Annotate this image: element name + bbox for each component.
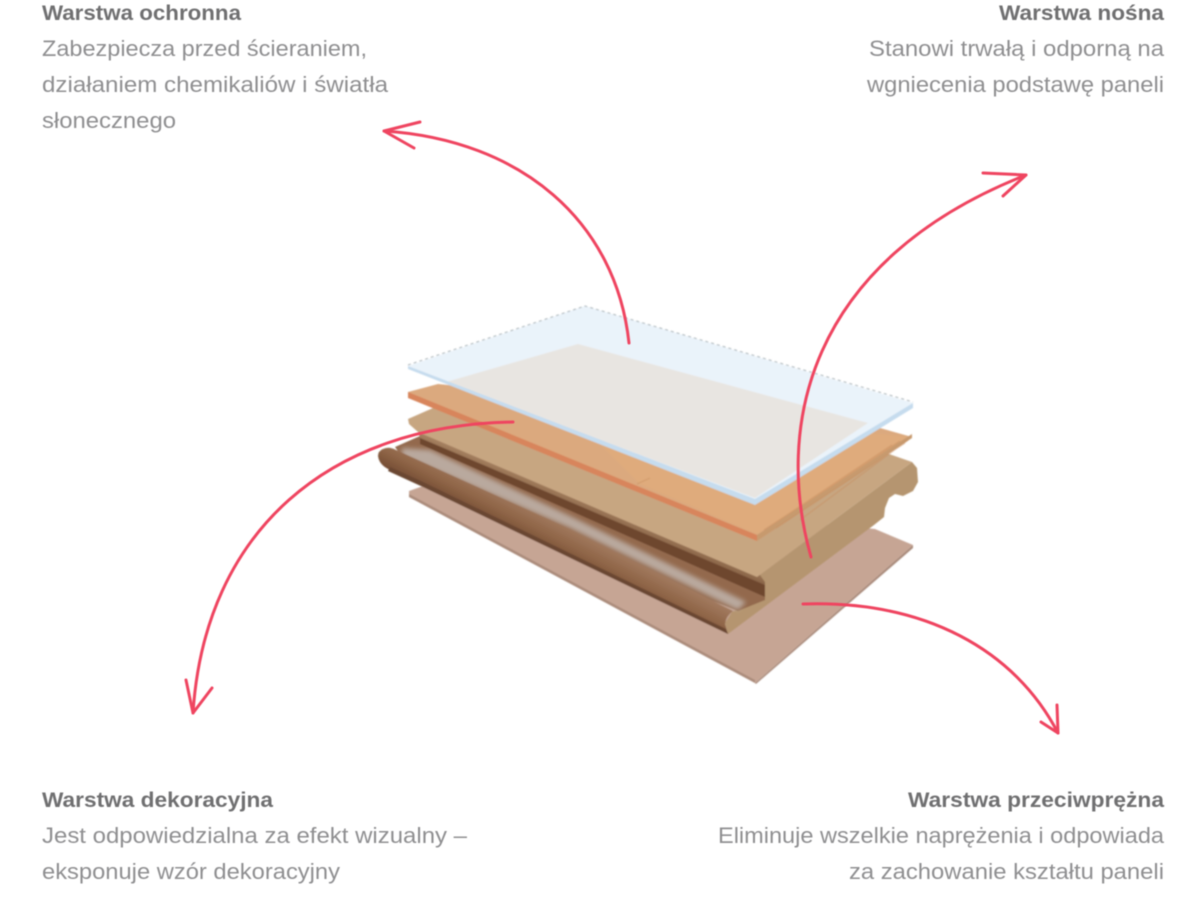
core side profile [725,462,918,634]
text block: Warstwa nośna [866,1,1165,97]
description: Warstwa przeciwprężna: za zachowanie kształtu paneli [849,859,1164,884]
description: Warstwa dekoracyjna: eksponuje wzór dekoracyjny [42,859,341,884]
description: Warstwa ochronna [42,36,389,133]
arrow: to Warstwa ochronna [384,122,629,343]
description: Warstwa nośna: Stanowi trwałą i odporną na [869,36,1165,61]
description: Warstwa przeciwprężna [718,823,1164,884]
layer: core board (Warstwa nośna) [378,408,918,634]
core front lip shading [418,431,765,585]
arrow: to Warstwa nośna [798,173,1026,557]
text block: Warstwa ochronna [42,1,389,133]
panel layers illustration [378,306,918,684]
dark groove [420,436,765,597]
heading: Warstwa ochronna: Warstwa ochronna [42,1,242,25]
arrow: to Warstwa dekoracyjna [186,422,513,713]
channel behind the lip [395,436,765,611]
description: Warstwa ochronna: Zabezpiecza przed ścieraniem, [42,36,367,61]
text block: Warstwa dekoracyjna [42,788,468,884]
description: Warstwa ochronna: działaniem chemikaliów i światła [42,72,389,97]
layer: backing sheet (Warstwa przeciwprężna) [409,486,913,684]
core top [408,408,912,577]
heading: Warstwa przeciwprężna: Warstwa przeciwprężna [908,788,1165,812]
description: Warstwa przeciwprężna: Eliminuje wszelkie naprężenia i odpowiada [718,823,1164,848]
heading: Warstwa dekoracyjna: Warstwa dekoracyjna [42,788,274,812]
description: Warstwa dekoracyjna [42,823,468,884]
layer: decorative veneer (Warstwa dekoracyjna) [408,384,912,541]
description: Warstwa ochronna: słonecznego [42,108,176,133]
description: Warstwa nośna [866,36,1165,97]
description: Warstwa dekoracyjna: Jest odpowiedzialna za efekt wizualny – [42,823,468,848]
arrow: to Warstwa przeciwprężna [803,604,1058,733]
locking lip [378,448,733,634]
light strip in channel [402,448,746,610]
text block: Warstwa przeciwprężna [718,788,1165,884]
layer: protective glass (Warstwa ochronna) [408,306,913,505]
description: Warstwa nośna: wgniecenia podstawę paneli [866,72,1164,97]
heading: Warstwa nośna: Warstwa nośna [999,1,1165,25]
